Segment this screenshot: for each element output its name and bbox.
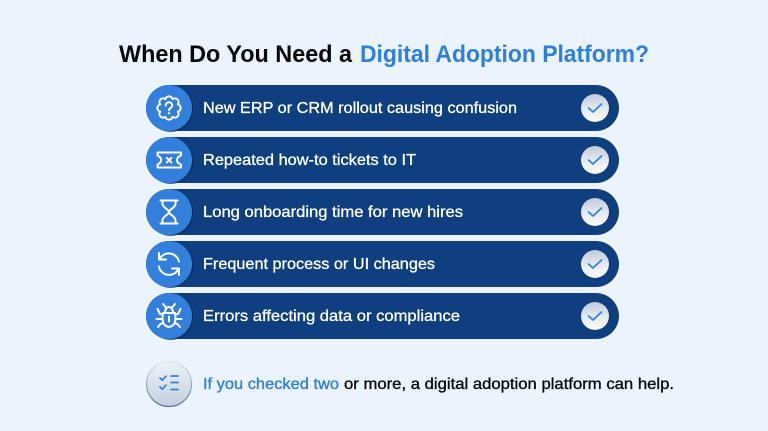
row: data or compliance errors: [146, 293, 619, 340]
check button: [581, 146, 609, 174]
title: When Do You Need a: [119, 41, 353, 68]
check button: [581, 250, 609, 278]
callout: or more, a digital adoption platform can help.: [344, 376, 674, 393]
icon: question badge: [146, 85, 192, 131]
check button: [581, 302, 609, 330]
label: Repeated how-to tickets to IT: [203, 152, 416, 169]
label: Frequent process or UI changes: [203, 256, 435, 273]
callout: [203, 376, 674, 393]
label: Errors affecting data or compliance: [203, 308, 460, 325]
icon: checklist: [146, 362, 192, 406]
row: onboarding time: [146, 189, 619, 236]
callout: If you checked two: [203, 376, 339, 393]
title: Digital Adoption Platform?: [360, 41, 649, 68]
row: how-to tickets: [146, 137, 619, 184]
row: ERP or CRM rollout: [146, 85, 619, 132]
icon: hourglass: [146, 189, 192, 235]
icon: refresh arrows: [146, 241, 192, 287]
title: [119, 41, 649, 68]
icon: ticket: [146, 137, 192, 183]
label: New ERP or CRM rollout causing confusion: [203, 100, 517, 117]
check button: [581, 198, 609, 226]
row: process or UI changes: [146, 241, 619, 288]
check button: [581, 94, 609, 122]
label: Long onboarding time for new hires: [203, 204, 463, 221]
icon: bug: [146, 293, 192, 339]
